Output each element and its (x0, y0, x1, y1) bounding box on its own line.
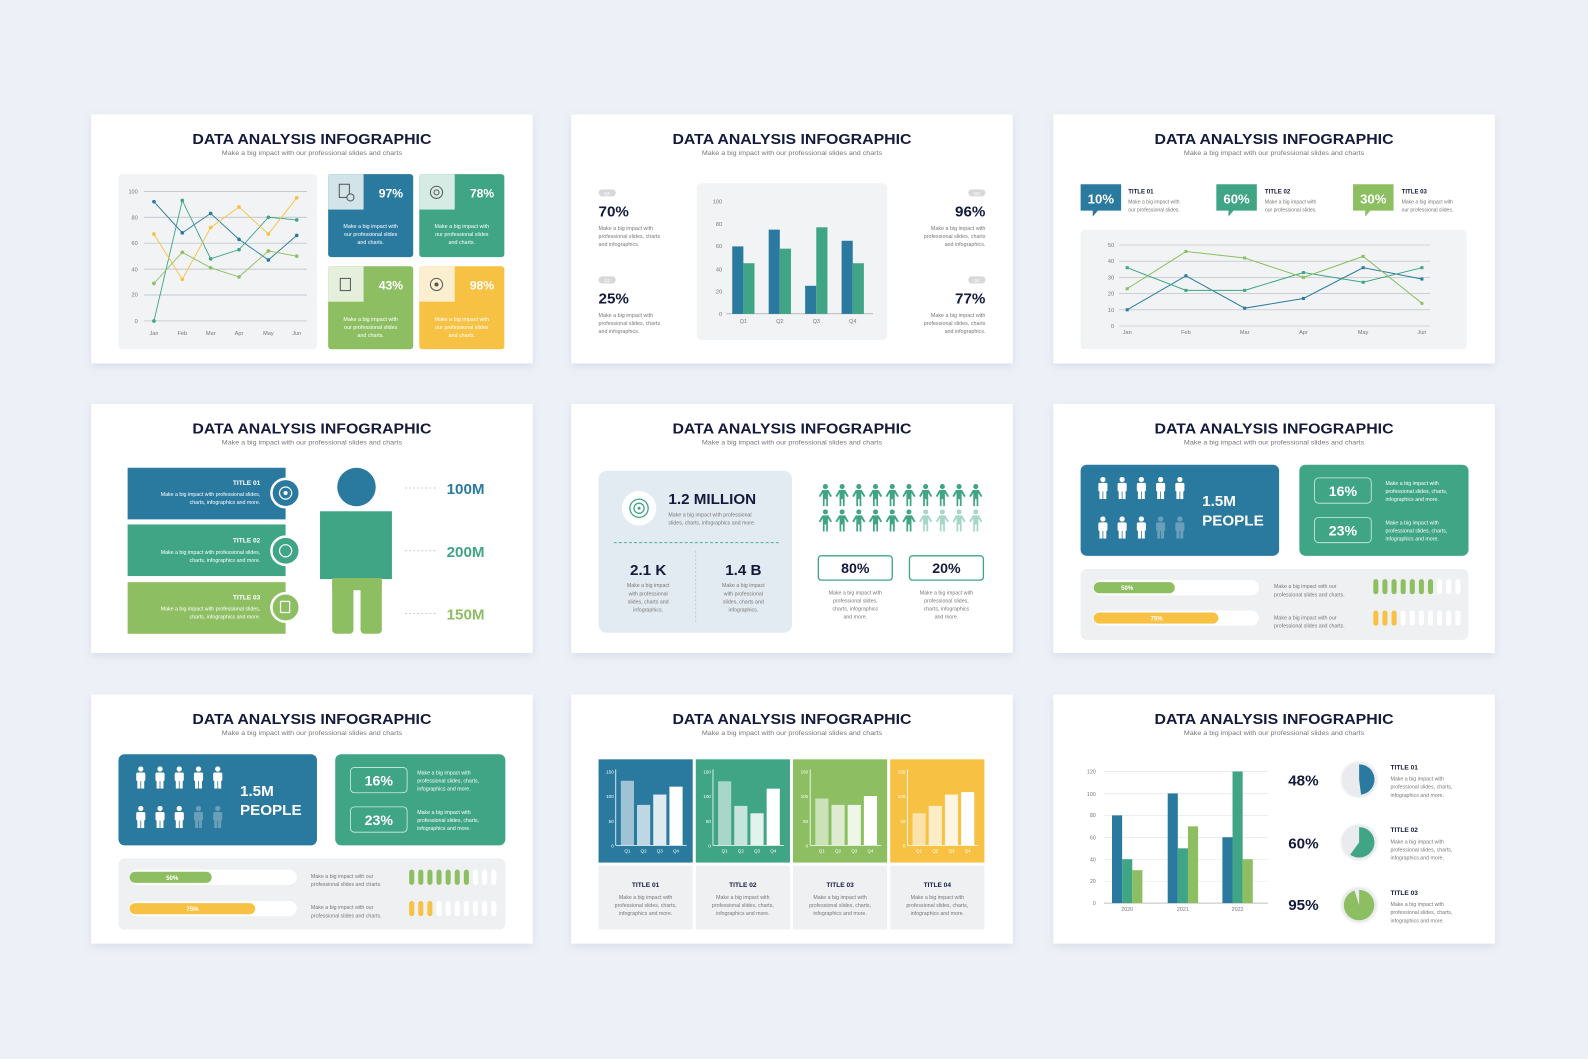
percent panel: 23% (1329, 524, 1357, 540)
stats panel: 1.2 MILLION (668, 491, 756, 508)
stats panel: slides, charts and (723, 599, 764, 605)
column 2: 50 (706, 819, 711, 824)
column 3: professional slides, charts, (809, 903, 871, 909)
line chart: 50 (1108, 243, 1114, 249)
callout 60%: 60% (1223, 192, 1250, 206)
column 1: Q4 (673, 848, 680, 853)
stat Q4: Q4 (974, 278, 980, 283)
percent panel: infographics and more. (1385, 497, 1439, 503)
stat 20%: and more. (935, 615, 958, 621)
subtitle: Make a big impact with our professional slides and charts (222, 731, 402, 737)
stats panel (599, 471, 792, 633)
people panel: 1.5M (240, 783, 274, 800)
title: DATA ANALYSIS INFOGRAPHIC (192, 131, 431, 148)
pie 48% (1288, 761, 1452, 799)
line chart: 0 (135, 319, 138, 325)
progress panel (118, 859, 505, 929)
card 78%: Make a big impact with (435, 224, 489, 230)
column 2: Q2 (738, 848, 744, 853)
stats panel: slides, charts and (628, 599, 669, 605)
banner 03: TITLE 03 (233, 594, 261, 601)
title: DATA ANALYSIS INFOGRAPHIC (1155, 711, 1394, 728)
stat Q1: and infographics. (599, 242, 639, 248)
people grid (819, 484, 982, 532)
callout 30%: TITLE 03 (1402, 189, 1428, 195)
slide 6: 1.5M people with progress bars (1053, 404, 1495, 653)
pie 60%: infographics and more. (1391, 856, 1444, 862)
percent panel: Make a big impact with (1385, 520, 1439, 526)
line chart: 40 (132, 267, 138, 273)
line chart: Apr (1299, 330, 1308, 336)
bar chart: 60 (716, 244, 722, 250)
percent panel: Make a big impact with (1385, 481, 1439, 487)
column 1: TITLE 01 (632, 882, 660, 889)
stat Q1: 70% (599, 204, 629, 221)
stat Q4: professional slides, charts (924, 321, 986, 327)
card 43%: Make a big impact with (343, 317, 398, 323)
card 78%: and charts. (449, 240, 475, 246)
column 2: Q4 (770, 848, 777, 853)
stat Q2 (599, 276, 661, 335)
column 3: Q3 (851, 848, 858, 853)
stat Q3: Q3 (974, 191, 980, 196)
pie 95%: Make a big impact with (1391, 902, 1444, 908)
column 3: Q4 (867, 848, 874, 853)
title: DATA ANALYSIS INFOGRAPHIC (672, 711, 912, 728)
progress panel: professional slides and charts. (1274, 592, 1345, 598)
callout 10%: Make a big impact with (1128, 199, 1180, 205)
values: 100M (447, 481, 485, 498)
values: 200M (447, 544, 485, 561)
stat Q2: 25% (599, 291, 629, 308)
stats panel: infographics. (728, 608, 758, 614)
bar chart: 60 (1090, 835, 1096, 841)
percent panel: 16% (365, 774, 393, 790)
slide 5: 1.2 million stats with people grid (571, 404, 1013, 653)
banner 02: Make a big impact with professional slides, (161, 550, 260, 556)
stats panel: Make a big impact (722, 583, 765, 589)
card 97%: 97% (379, 186, 403, 200)
card 97% (328, 174, 413, 257)
percent panel: Make a big impact with (417, 771, 471, 777)
bar chart: 2020 (1121, 907, 1133, 913)
people panel: 1.5M (1202, 493, 1236, 510)
stat Q2: Q2 (604, 278, 611, 283)
banner 03: Make a big impact with professional slides, (161, 606, 260, 612)
line chart: May (1358, 330, 1369, 336)
stat 80%: and more. (843, 615, 867, 621)
progress panel: Make a big impact with our (1274, 616, 1337, 622)
line chart: 20 (1108, 292, 1114, 298)
card 43%: our professional slides (344, 325, 398, 331)
card 43%: 43% (379, 279, 403, 293)
card 98% (419, 266, 504, 349)
slide 3: callouts and line chart (1053, 114, 1495, 363)
people panel (1081, 465, 1279, 556)
column 2: 100 (703, 794, 711, 799)
percent panel: professional slides, charts, (417, 779, 479, 785)
stat 20%: Make a big impact with (920, 590, 973, 596)
column 4: Q4 (965, 848, 971, 853)
line chart: Jun (292, 331, 301, 337)
line chart: Mar (206, 331, 216, 337)
pie 60%: TITLE 02 (1391, 827, 1418, 834)
stat Q1: Q1 (604, 191, 611, 196)
percent panel: infographics and more. (417, 826, 471, 832)
card 78%: our professional slides (435, 232, 489, 238)
column 3: 0 (806, 843, 809, 848)
bar chart (697, 183, 887, 340)
stat Q3: 96% (955, 204, 986, 221)
card 98%: Make a big impact with (435, 317, 489, 323)
progress panel: 50% (166, 876, 179, 882)
pie 95%: infographics and more. (1391, 918, 1444, 924)
column 4: 100 (898, 794, 906, 799)
column 4: TITLE 04 (924, 882, 951, 889)
progress panel: Make a big impact with our (311, 905, 374, 911)
column 1: 150 (606, 769, 614, 774)
title: DATA ANALYSIS INFOGRAPHIC (672, 131, 912, 148)
bar chart: Q1 (740, 319, 747, 325)
line chart: Apr (235, 331, 243, 337)
card 78%: 78% (470, 186, 494, 200)
line chart: 10 (1108, 308, 1114, 314)
line chart: Jan (149, 331, 158, 337)
banner 01: charts, infographics and more. (190, 500, 260, 506)
callout 10%: our professional slides. (1128, 208, 1180, 214)
pie 95%: TITLE 03 (1391, 890, 1418, 897)
column 4: 0 (903, 843, 906, 848)
column 1: Q2 (641, 848, 647, 853)
percent panel: 23% (365, 813, 393, 829)
column 4: Q1 (916, 848, 923, 853)
progress panel: professional slides and charts. (311, 882, 382, 888)
bar chart: 120 (1087, 769, 1096, 775)
pie 48%: Make a big impact with (1391, 777, 1444, 783)
progress panel: 50% (1121, 586, 1134, 592)
callout 30%: Make a big impact with (1402, 199, 1453, 205)
column 1: 100 (606, 794, 614, 799)
column 1: 0 (611, 843, 614, 848)
pie 60%: professional slides, charts, (1391, 847, 1452, 853)
line chart: Feb (178, 331, 187, 337)
banner 03: charts, infographics and more. (190, 615, 260, 621)
line chart: Jun (1417, 330, 1426, 336)
column 1: Q1 (624, 848, 631, 853)
card 97%: Make a big impact with (343, 224, 398, 230)
stats panel: with professional (724, 591, 763, 597)
stat 80%: 80% (841, 561, 870, 577)
line chart: Mar (1240, 330, 1250, 336)
title: DATA ANALYSIS INFOGRAPHIC (192, 420, 431, 437)
progress panel: professional slides and charts. (311, 913, 382, 919)
stat 20%: charts, infographics (924, 606, 970, 612)
stat Q4: and infographics. (945, 329, 985, 335)
stat 80%: professional slides, (833, 598, 878, 604)
progress panel: Make a big impact with our (311, 874, 374, 880)
percent panel (335, 754, 505, 845)
values: 150M (447, 607, 485, 624)
progress panel: 75% (186, 907, 199, 913)
line chart: 40 (1108, 259, 1114, 265)
stat Q3 (924, 189, 986, 248)
column 2: Q3 (754, 848, 761, 853)
column 1: professional slides, charts, (615, 903, 677, 909)
progress panel: 75% (1150, 617, 1163, 623)
column 3: 150 (801, 769, 809, 774)
stat Q4: 77% (955, 291, 986, 308)
progress panel (1081, 569, 1468, 640)
callout 30%: 30% (1360, 192, 1387, 206)
stat Q4 (924, 276, 986, 335)
card 98%: our professional slides (435, 325, 489, 331)
slide 1: line chart with stat cards (91, 114, 533, 363)
callout 10%: TITLE 01 (1128, 189, 1154, 195)
column 4: 50 (900, 819, 906, 824)
stat Q3: Make a big impact with (931, 226, 985, 232)
callout 60% (1216, 184, 1317, 217)
card 98%: 98% (470, 279, 494, 293)
banner 01 (128, 468, 300, 519)
person figure (320, 468, 392, 634)
slide 2: quarterly bar chart with stats (571, 114, 1013, 363)
stat Q1: professional slides, charts (599, 234, 661, 240)
stats panel: slides, charts, infographics and more. (668, 520, 755, 526)
callout 30%: our professional slides. (1402, 208, 1453, 214)
stats panel: Make a big impact with professional (668, 512, 752, 518)
stat Q4: Make a big impact with (931, 313, 985, 319)
subtitle: Make a big impact with our professional slides and charts (1184, 440, 1364, 446)
subtitle: Make a big impact with our professional slides and charts (1184, 731, 1364, 737)
stats panel: infographics. (633, 608, 663, 614)
bar chart: Q4 (849, 319, 856, 325)
percent panel: infographics and more. (417, 787, 471, 793)
column 2: Make a big impact with (716, 895, 770, 901)
stat Q2: professional slides, charts (599, 321, 661, 327)
percent panel: infographics and more. (1385, 537, 1439, 543)
bar chart: 2021 (1177, 907, 1189, 913)
bar chart: 20 (716, 290, 722, 296)
subtitle: Make a big impact with our professional slides and charts (222, 151, 402, 157)
subtitle: Make a big impact with our professional slides and charts (702, 440, 882, 446)
card 97%: and charts. (357, 240, 384, 246)
progress panel: professional slides and charts. (1274, 624, 1345, 630)
stat 80%: Make a big impact with (829, 590, 882, 596)
column 1 (599, 759, 693, 929)
column 4: 150 (898, 769, 906, 774)
bar chart: 80 (1090, 813, 1096, 819)
column 2 (696, 759, 790, 929)
column 1: Make a big impact with (619, 895, 672, 901)
percent panel: professional slides, charts, (417, 818, 479, 824)
percent panel: Make a big impact with (417, 810, 471, 816)
line chart (118, 174, 317, 349)
callout 30% (1353, 184, 1453, 217)
title: DATA ANALYSIS INFOGRAPHIC (672, 420, 912, 437)
stat Q1: Make a big impact with (599, 226, 653, 232)
callout 60%: TITLE 02 (1265, 189, 1291, 195)
bar chart: 80 (716, 222, 722, 228)
column 3: Q2 (835, 848, 842, 853)
line chart: 80 (132, 216, 138, 222)
bar chart: 0 (719, 312, 722, 318)
subtitle: Make a big impact with our professional slides and charts (222, 440, 402, 446)
column 3: 50 (803, 819, 809, 824)
column 4: Q3 (948, 848, 955, 853)
card 43% (328, 266, 413, 349)
stat Q3: professional slides, charts (924, 234, 986, 240)
line chart: 30 (1108, 275, 1114, 281)
column 4: Make a big impact with (911, 895, 964, 901)
column 2: infographics and more. (716, 911, 770, 917)
line chart: 20 (132, 293, 138, 299)
line chart: May (263, 331, 274, 337)
slide 9: yearly bar chart with pies (1053, 695, 1495, 944)
line chart: Jan (1123, 330, 1132, 336)
banner 03 (128, 582, 300, 634)
stats panel: 2.1 K (630, 562, 666, 579)
progress panel: Make a big impact with our (1274, 584, 1337, 590)
card 78% (419, 174, 504, 257)
people panel: PEOPLE (240, 802, 302, 819)
percent panel (1299, 465, 1468, 556)
pie 95%: 95% (1288, 897, 1319, 914)
title: DATA ANALYSIS INFOGRAPHIC (1155, 131, 1394, 148)
bar chart: Q2 (776, 319, 784, 325)
subtitle: Make a big impact with our professional slides and charts (1184, 151, 1364, 157)
banner 02: charts, infographics and more. (190, 558, 260, 564)
percent panel: 16% (1329, 484, 1357, 500)
card 97%: our professional slides (344, 232, 398, 238)
bar chart: 2022 (1232, 907, 1244, 913)
callout 10%: 10% (1088, 192, 1114, 206)
column 1: 50 (609, 819, 614, 824)
percent panel: professional slides, charts, (1385, 489, 1447, 495)
stat 20%: professional slides, (924, 598, 969, 604)
banner 01: TITLE 01 (233, 480, 261, 487)
callout 60%: Make a big impact with (1265, 199, 1316, 205)
title: DATA ANALYSIS INFOGRAPHIC (192, 711, 431, 728)
bar chart: 20 (1090, 879, 1096, 885)
callout 60%: our professional slides. (1265, 208, 1317, 214)
banner 02: TITLE 02 (233, 538, 261, 545)
column 2: 0 (708, 843, 711, 848)
column 4: infographics and more. (911, 911, 964, 917)
column 3: infographics and more. (813, 911, 867, 917)
bar chart: 100 (1087, 792, 1096, 798)
stat 20%: 20% (932, 561, 961, 577)
card 98%: and charts. (449, 333, 475, 339)
pie 95%: professional slides, charts, (1391, 910, 1452, 916)
column 2: Q1 (722, 848, 728, 853)
stats panel: with professional (629, 591, 668, 597)
column 3 (793, 759, 887, 929)
stat 20% (909, 556, 983, 621)
column 3: TITLE 03 (826, 882, 854, 889)
line chart: 0 (1111, 324, 1114, 330)
stat 80%: charts, infographics (833, 606, 878, 612)
pie 48%: TITLE 01 (1391, 764, 1418, 771)
pie 48%: professional slides, charts, (1391, 785, 1452, 791)
stat Q1 (599, 189, 661, 248)
percent panel: professional slides, charts, (1385, 529, 1447, 535)
pie 60%: Make a big impact with (1391, 839, 1444, 845)
bar chart: 100 (713, 199, 722, 205)
slide 8: four mini bar charts (571, 695, 1013, 944)
title: DATA ANALYSIS INFOGRAPHIC (1155, 420, 1394, 437)
pie 60%: 60% (1288, 835, 1319, 852)
card 43%: and charts. (357, 333, 384, 339)
subtitle: Make a big impact with our professional slides and charts (702, 151, 882, 157)
subtitle: Make a big impact with our professional slides and charts (702, 731, 882, 737)
column 3: Q1 (819, 848, 825, 853)
values (405, 481, 485, 624)
column 2: TITLE 02 (729, 882, 757, 889)
line chart (1081, 230, 1466, 349)
column 4: Q2 (932, 848, 939, 853)
bar chart: Q3 (813, 319, 820, 325)
slide 4: person figure with banners (91, 404, 533, 653)
pie 48%: infographics and more. (1391, 793, 1444, 799)
banner 01: Make a big impact with professional slides, (161, 492, 260, 498)
line chart: 60 (132, 241, 138, 247)
bar chart: 40 (1090, 858, 1096, 864)
pie 95% (1288, 887, 1452, 924)
banner 02 (128, 524, 300, 576)
callout 10% (1081, 184, 1180, 217)
column 1: Q3 (657, 848, 663, 853)
column 2: 150 (703, 769, 711, 774)
people panel (118, 754, 317, 845)
stat Q3: and infographics. (945, 242, 985, 248)
stat Q2: Make a big impact with (599, 313, 653, 319)
column 4 (890, 759, 984, 929)
bar chart (1087, 769, 1268, 913)
column 1: infographics and more. (619, 911, 672, 917)
stat Q2: and infographics. (599, 329, 639, 335)
stat 80% (818, 556, 892, 621)
column 3: 100 (801, 794, 809, 799)
line chart: Feb (1181, 330, 1191, 336)
pie 60% (1288, 824, 1452, 862)
stats panel: Make a big impact (627, 583, 670, 589)
bar chart: 0 (1093, 901, 1096, 907)
column 4: professional slides, charts, (906, 903, 968, 909)
stats panel: 1.4 B (725, 562, 762, 579)
line chart: 100 (128, 189, 138, 195)
pie 48%: 48% (1288, 773, 1319, 790)
people panel: PEOPLE (1202, 512, 1264, 529)
column 2: professional slides, charts, (712, 903, 774, 909)
slide 7: 1.5M people with progress bars (variant) (91, 695, 533, 944)
bar chart: 40 (716, 267, 722, 273)
column 3: Make a big impact with (813, 895, 867, 901)
